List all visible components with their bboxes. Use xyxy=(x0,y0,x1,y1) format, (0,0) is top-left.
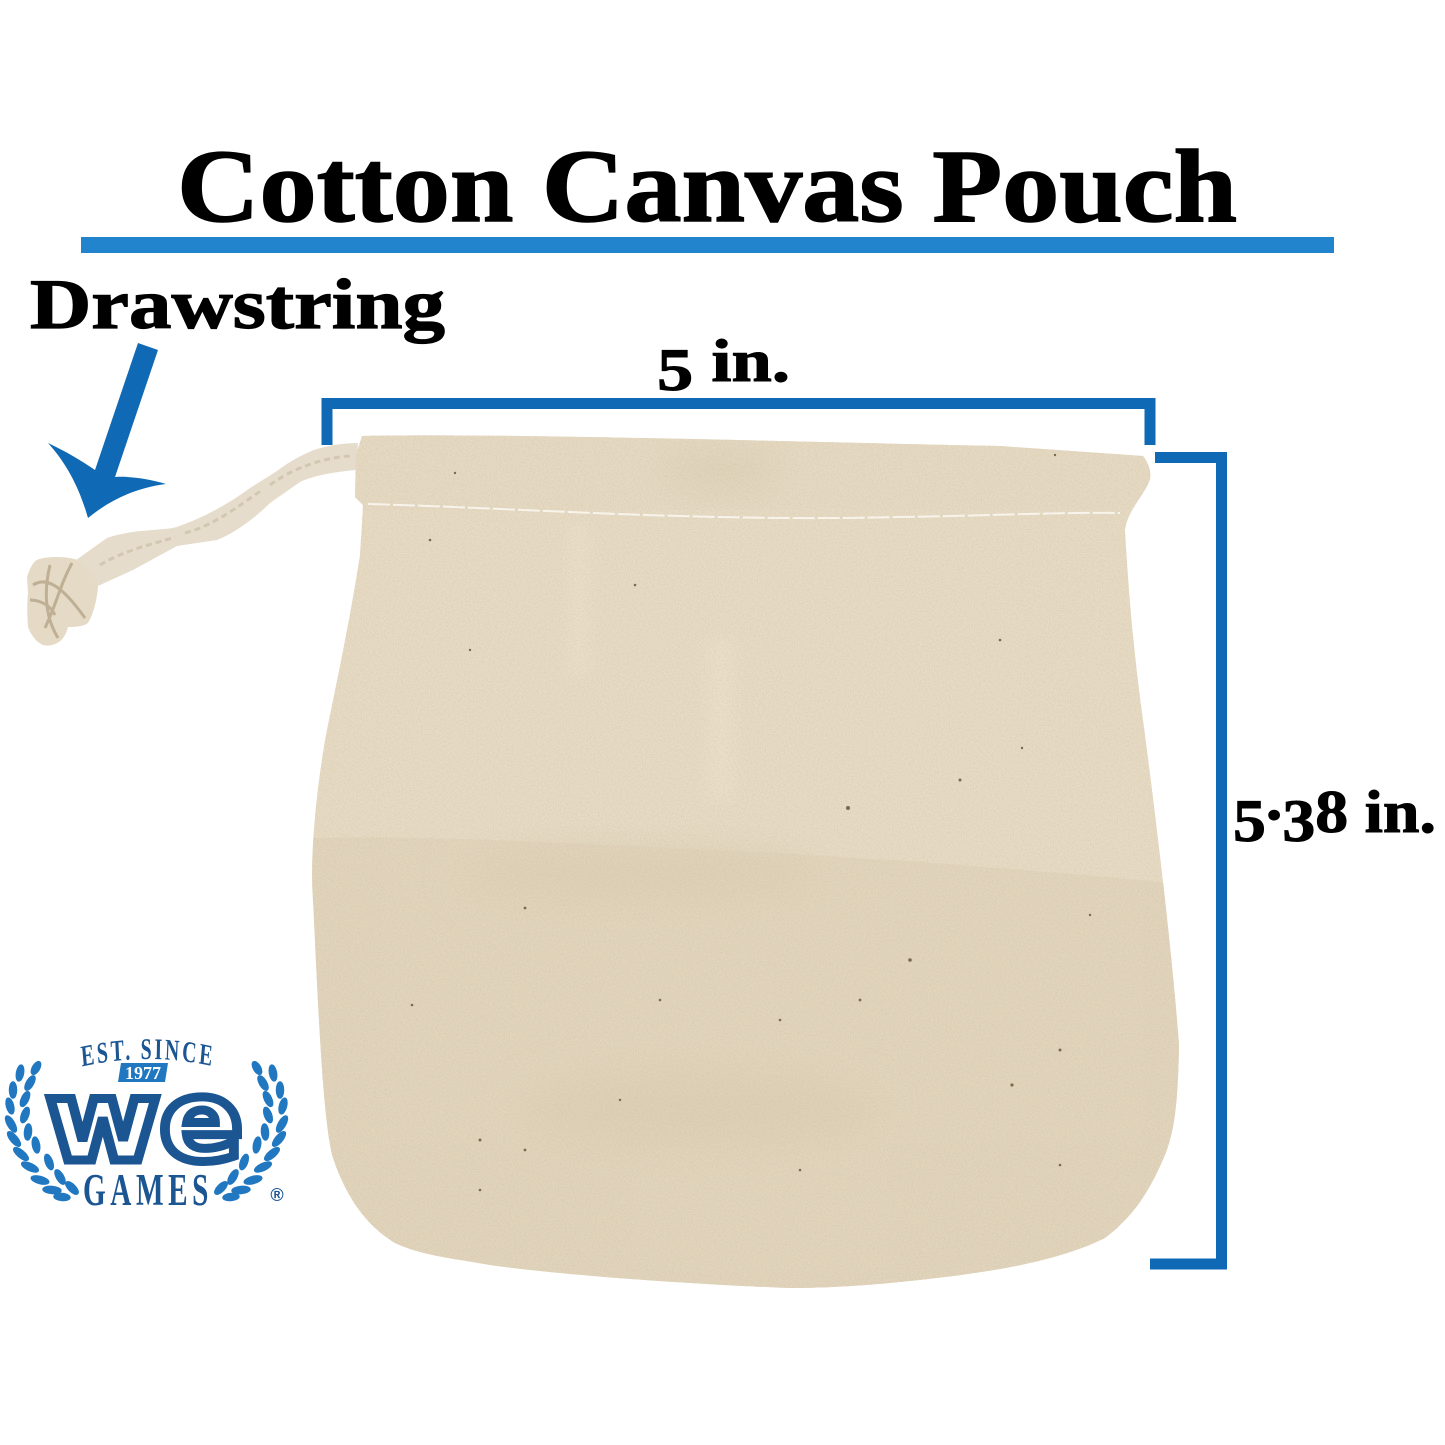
seam stitching xyxy=(368,504,1120,518)
top hem xyxy=(350,430,1160,510)
logo: games: GAMES xyxy=(83,1166,213,1216)
logo: right laurel xyxy=(213,1060,290,1201)
height bracket xyxy=(1150,458,1222,1264)
darker lower panel xyxy=(300,837,1190,1300)
label: drawstring: Drawstring xyxy=(30,266,445,344)
logo: year badge: 1977 xyxy=(125,1063,161,1083)
label: height: . xyxy=(1266,766,1282,832)
logo: we wordmark: we xyxy=(46,1057,243,1187)
soft folds xyxy=(570,525,588,675)
label: height: 8 in. xyxy=(1315,779,1436,845)
width bracket xyxy=(327,404,1150,445)
logo: est since xyxy=(80,1039,212,1066)
drawstring rope with knot xyxy=(27,443,358,646)
title: Cotton Canvas Pouch xyxy=(177,129,1237,244)
label: width: 5 xyxy=(657,337,693,403)
logo: WE Games xyxy=(4,1039,288,1216)
label: height: 5 xyxy=(1233,788,1266,854)
logo: left laurel xyxy=(3,1060,80,1201)
flecks xyxy=(411,454,1091,1191)
label: height: 3 xyxy=(1282,788,1315,854)
label: width: in. xyxy=(693,328,790,394)
logo: est since: EST. SINCE xyxy=(80,1039,212,1066)
knot xyxy=(27,557,98,646)
logo: registered mark: ® xyxy=(270,1185,284,1205)
title underline xyxy=(81,237,1334,253)
icon: drawstring arrow xyxy=(48,343,166,518)
rope xyxy=(76,443,358,586)
canvas pouch xyxy=(300,425,1190,1300)
